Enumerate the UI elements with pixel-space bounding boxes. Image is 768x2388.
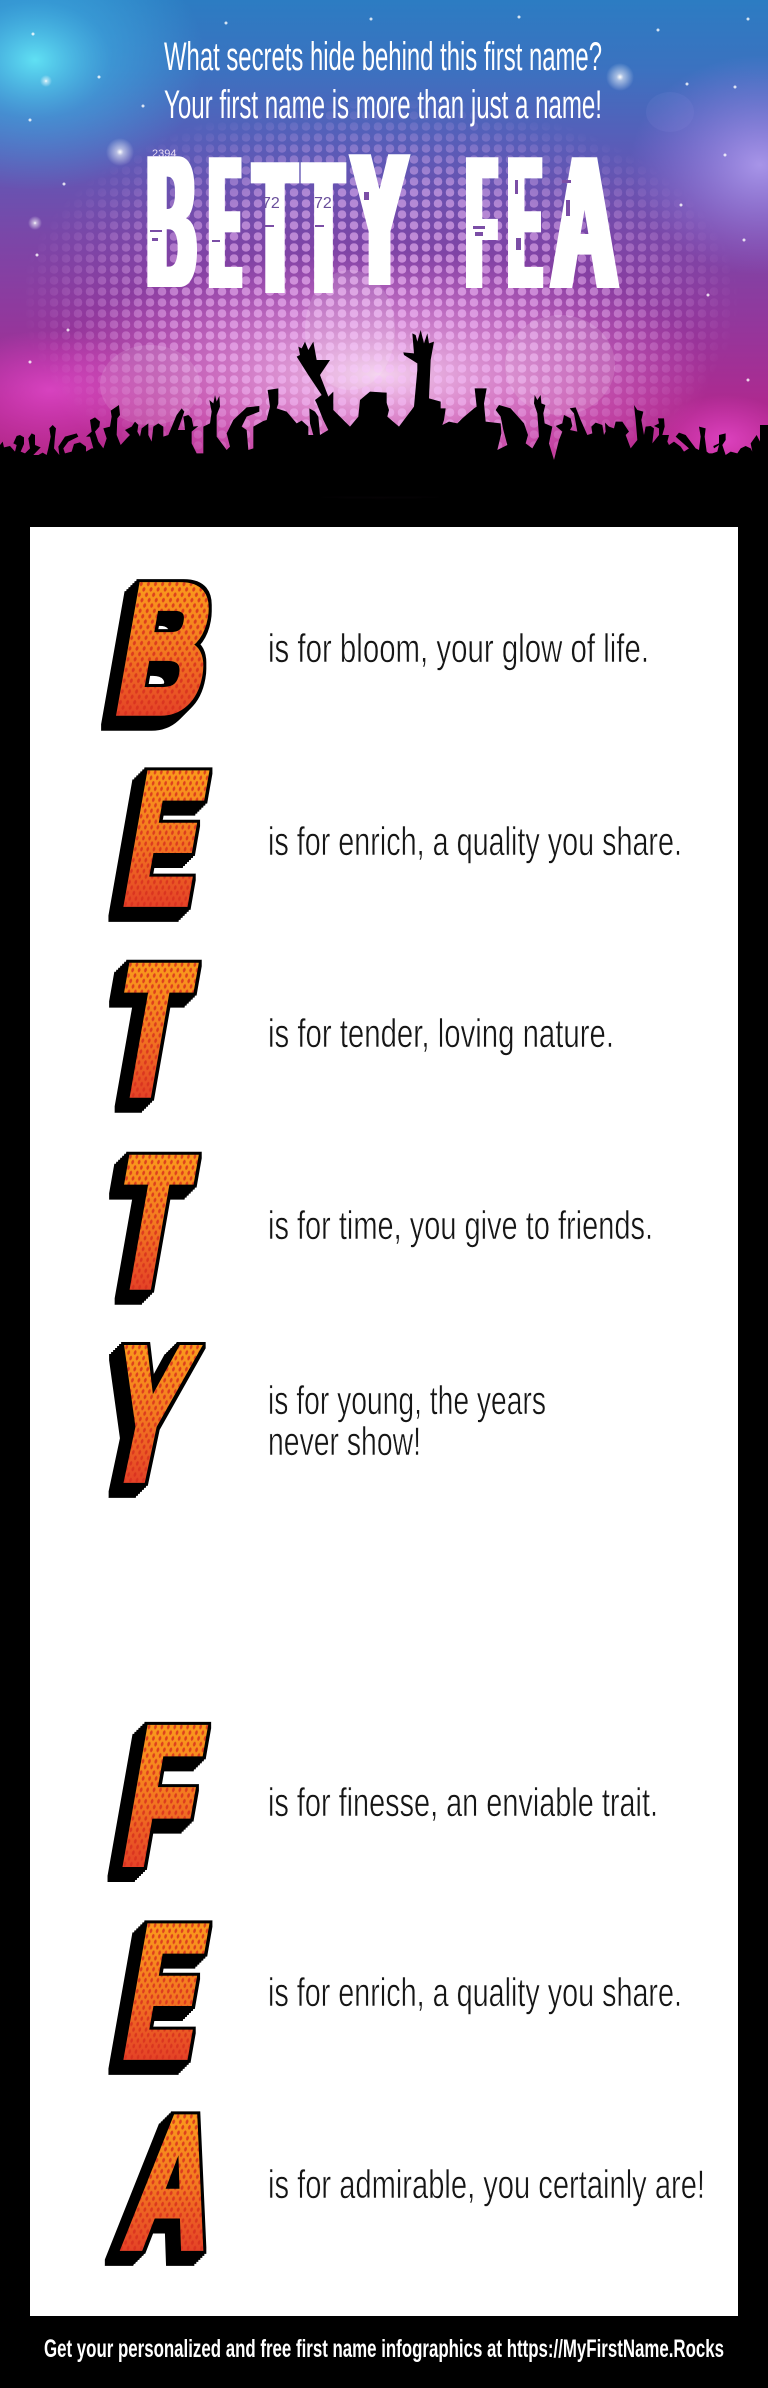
- title: BETTY FEA: E: [510, 117, 540, 329]
- row: F: [112, 1689, 658, 1903]
- title: BETTY FEA: F: [468, 117, 495, 329]
- title: BETTY FEA: T: [305, 122, 342, 334]
- text: A: [552, 117, 617, 329]
- icon: comic letter E: E: [113, 1890, 219, 2095]
- row: Y: [91, 1310, 546, 1518]
- panel: white letters card: [30, 527, 738, 2316]
- icon: comic letter A: A: [115, 2079, 232, 2285]
- icon: comic letter Y: Y: [91, 1310, 207, 1518]
- heading: tagline: [164, 35, 602, 127]
- title: BETTY FEA: [148, 114, 617, 334]
- text: T line: is for tender, loving nature.: [268, 1012, 614, 1056]
- icon: comic letter T: T: [101, 1121, 203, 1325]
- row: E second: [113, 1890, 682, 2095]
- title: BETTY FEA: 72: [262, 195, 280, 212]
- icon: comic letter F: F: [112, 1689, 216, 1903]
- title: BETTY FEA: Y: [352, 114, 407, 326]
- title: BETTY FEA: T: [255, 122, 295, 334]
- text: Y lines: [268, 1379, 546, 1464]
- title: BETTY FEA: E: [211, 117, 239, 329]
- row: E: [113, 737, 682, 942]
- title: BETTY FEA: B: [148, 116, 195, 328]
- icon: comic letter E: E: [113, 737, 219, 942]
- icon: comic letter B: B: [105, 548, 227, 749]
- row: A: [115, 2079, 705, 2285]
- title: BETTY FEA: 2394: [152, 148, 176, 160]
- row: B: [105, 548, 649, 749]
- crowd silhouette: [0, 330, 768, 497]
- title: BETTY FEA: 72: [314, 195, 332, 212]
- text: Y lines: never show!: [268, 1420, 421, 1464]
- row: T second: [101, 1121, 653, 1325]
- row: T: [101, 929, 614, 1133]
- text: Y lines: is for young, the years: [268, 1379, 546, 1423]
- panel: concert header background: [0, 0, 768, 500]
- icon: comic letter T: T: [101, 929, 203, 1133]
